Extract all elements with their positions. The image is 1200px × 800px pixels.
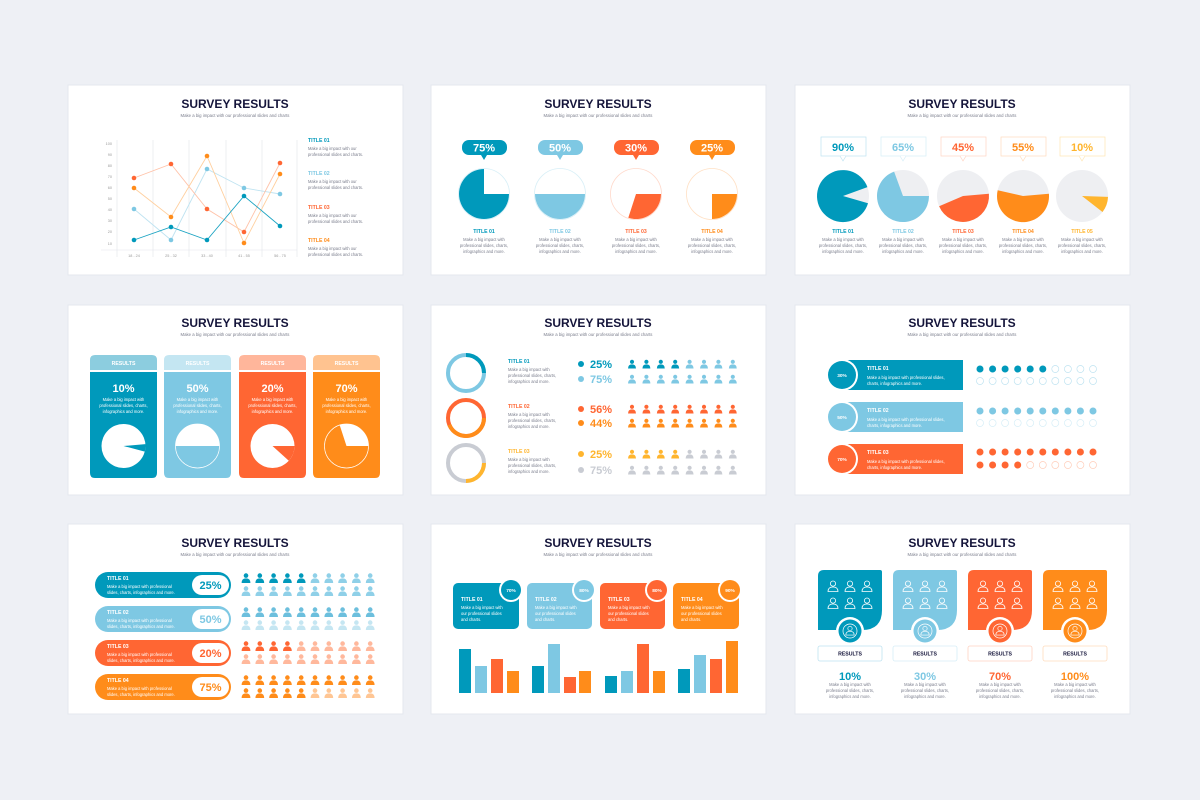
row 2: charts, infographics and more. <box>867 423 922 428</box>
captions: TITLE 02 <box>549 229 571 235</box>
title: SURVEY RESULTS <box>544 316 652 330</box>
pills: TITLE 01 <box>107 576 129 582</box>
card 2: Make a big impact with <box>177 397 219 402</box>
captions: professional slides, charts, <box>999 243 1047 248</box>
cards: and charts. <box>461 617 481 622</box>
people grid <box>628 360 737 474</box>
cards: TITLE 02 <box>535 597 557 603</box>
captions: TITLE 01 <box>473 229 495 235</box>
captions: TITLE 04 <box>701 229 723 235</box>
card 2: infographics and more. <box>177 409 218 414</box>
row texts: Make a big impact with <box>508 412 550 417</box>
pills: Make a big impact with professional <box>107 652 172 657</box>
card 4: infographics and more. <box>1054 694 1096 699</box>
row texts: professional slides, charts, <box>508 418 556 423</box>
subtitle: Make a big impact with our professional slides and charts <box>181 552 289 557</box>
row 3: charts, infographics and more. <box>867 465 922 470</box>
legend: Make a big impact with our <box>308 213 357 218</box>
line chart: 10 <box>108 242 112 246</box>
title: SURVEY RESULTS <box>181 316 289 330</box>
slide 5: rings and people <box>431 305 766 495</box>
captions: Make a big impact with <box>691 237 734 242</box>
card 2: RESULTS <box>913 652 937 658</box>
cards: and charts. <box>608 617 628 622</box>
card 4 <box>1043 570 1107 699</box>
card 4: Make a big impact with <box>1054 682 1097 687</box>
card 1: infographics and more. <box>103 409 144 414</box>
line chart: 60 <box>108 186 112 190</box>
card 4: 100% <box>1061 671 1089 683</box>
captions: professional slides, charts, <box>688 243 736 248</box>
bubbles <box>462 140 735 160</box>
card 1: professional slides, charts, <box>826 688 874 693</box>
card 3: professional slides, charts, <box>976 688 1024 693</box>
slide 3: five pies: 65% <box>892 142 914 154</box>
card 4: 70% <box>335 383 358 395</box>
pills: TITLE 02 <box>107 610 129 616</box>
captions: professional slides, charts, <box>612 243 660 248</box>
legend: Make a big impact with our <box>308 146 357 151</box>
cards <box>453 578 742 629</box>
card 1: Make a big impact with <box>829 682 872 687</box>
subtitle: Make a big impact with our professional slides and charts <box>544 332 652 337</box>
captions: infographics and more. <box>822 249 864 254</box>
captions: Make a big impact with <box>615 237 658 242</box>
card 4: RESULTS <box>335 361 359 367</box>
legend: professional slides and charts. <box>308 185 363 190</box>
subtitle: Make a big impact with our professional slides and charts <box>544 552 652 557</box>
captions: Make a big impact with <box>1061 237 1104 242</box>
card 1: 10% <box>112 383 135 395</box>
slide 9: people cards <box>795 524 1130 714</box>
row 2: Make a big impact with professional slides, <box>867 417 945 422</box>
row 3: TITLE 03 <box>867 450 889 456</box>
legend: TITLE 04 <box>308 238 330 244</box>
cards: 90% <box>725 588 736 594</box>
captions: professional slides, charts, <box>536 243 584 248</box>
title: SURVEY RESULTS <box>544 536 652 550</box>
row texts: Make a big impact with <box>508 457 550 462</box>
card 1: 10% <box>839 671 861 683</box>
card 2: 50% <box>186 383 209 395</box>
captions <box>819 229 1106 254</box>
line chart: 56 - 75 <box>274 254 286 258</box>
line chart: 30 <box>108 219 112 223</box>
line chart: 90 <box>108 153 112 157</box>
line chart: 80 <box>108 164 112 168</box>
card 4: professional slides, charts, <box>322 403 371 408</box>
card 2: professional slides, charts, <box>173 403 222 408</box>
captions: professional slides, charts, <box>879 243 927 248</box>
card 3: 20% <box>261 383 284 395</box>
captions <box>460 229 736 254</box>
captions: TITLE 05 <box>1071 229 1093 235</box>
row 2 <box>826 401 963 433</box>
slide 1: line chart <box>68 85 403 275</box>
card 1: RESULTS <box>838 652 862 658</box>
subtitle: Make a big impact with our professional slides and charts <box>181 113 289 118</box>
card 3 <box>239 355 306 478</box>
captions: infographics and more. <box>539 249 581 254</box>
legend: Make a big impact with our <box>308 246 357 251</box>
card 1: professional slides, charts, <box>99 403 148 408</box>
legend: TITLE 03 <box>308 205 330 211</box>
slide 3: five pies: 90% <box>832 142 854 154</box>
card 3: infographics and more. <box>979 694 1021 699</box>
dot matrix <box>976 366 1096 468</box>
captions: professional slides, charts, <box>939 243 987 248</box>
captions: Make a big impact with <box>822 237 865 242</box>
pills: TITLE 03 <box>107 644 129 650</box>
bubbles: 30% <box>625 142 647 154</box>
pills: slides, charts, infographics and more. <box>107 590 175 595</box>
card 3 <box>968 570 1032 699</box>
cards: Make a big impact with <box>681 605 723 610</box>
percentages: 25% <box>590 359 612 371</box>
card 4: professional slides, charts, <box>1051 688 1099 693</box>
row texts: TITLE 02 <box>508 404 530 410</box>
captions: professional slides, charts, <box>1058 243 1106 248</box>
card 4: Make a big impact with <box>326 397 368 402</box>
captions: TITLE 04 <box>1012 229 1034 235</box>
row 3: 70% <box>837 457 848 463</box>
pills: slides, charts, infographics and more. <box>107 658 175 663</box>
subtitle: Make a big impact with our professional slides and charts <box>544 113 652 118</box>
captions: TITLE 01 <box>832 229 854 235</box>
card 3: 70% <box>989 671 1011 683</box>
line chart: 18 - 24 <box>128 254 140 258</box>
card 4: infographics and more. <box>326 409 367 414</box>
legend: professional slides and charts. <box>308 252 363 257</box>
captions: TITLE 03 <box>952 229 974 235</box>
slide 7: pills and people <box>68 524 403 714</box>
cards: TITLE 01 <box>461 597 483 603</box>
row 3: Make a big impact with professional slides, <box>867 459 945 464</box>
percentages: 75% <box>590 374 612 386</box>
slide 3: five pies <box>795 85 1130 275</box>
cards: and charts. <box>681 617 701 622</box>
card 3: RESULTS <box>261 361 285 367</box>
pills: 50% <box>199 614 222 626</box>
percentages: 25% <box>590 449 612 461</box>
pills <box>95 572 231 700</box>
cards: our professional slides <box>461 611 502 616</box>
legend: professional slides and charts. <box>308 152 363 157</box>
cards: 80% <box>579 588 590 594</box>
line chart: 40 <box>108 208 112 212</box>
boxes <box>821 137 1105 161</box>
cards: Make a big impact with <box>608 605 650 610</box>
row 3 <box>826 443 963 475</box>
line chart: 41 - 55 <box>238 254 250 258</box>
card 3: professional slides, charts, <box>248 403 297 408</box>
title: SURVEY RESULTS <box>181 536 289 550</box>
legend: professional slides and charts. <box>308 219 363 224</box>
line chart: 25 - 32 <box>165 254 177 258</box>
card 1: RESULTS <box>112 361 136 367</box>
row texts: infographics and more. <box>508 424 550 429</box>
card 4 <box>313 355 380 478</box>
subtitle: Make a big impact with our professional slides and charts <box>908 552 1016 557</box>
legend: TITLE 01 <box>308 138 330 144</box>
pills: Make a big impact with professional <box>107 618 172 623</box>
card 2 <box>164 355 231 478</box>
row 2: 50% <box>837 415 848 421</box>
pills: 75% <box>199 682 222 694</box>
captions: Make a big impact with <box>539 237 582 242</box>
slide 4: result cards <box>68 305 403 495</box>
subtitle: Make a big impact with our professional slides and charts <box>181 332 289 337</box>
legend: Make a big impact with our <box>308 179 357 184</box>
cards: and charts. <box>535 617 555 622</box>
rings <box>448 355 484 481</box>
pies <box>458 168 738 220</box>
pills: TITLE 04 <box>107 678 129 684</box>
bubbles: 25% <box>701 142 723 154</box>
cards: Make a big impact with <box>461 605 503 610</box>
card 2: Make a big impact with <box>904 682 947 687</box>
bar chart <box>459 641 738 693</box>
card 2: RESULTS <box>186 361 210 367</box>
percentages: 75% <box>590 465 612 477</box>
legend: TITLE 02 <box>308 171 330 177</box>
pills: Make a big impact with professional <box>107 686 172 691</box>
row 1: Make a big impact with professional slides, <box>867 375 945 380</box>
cards: TITLE 03 <box>608 597 630 603</box>
percentages <box>578 359 612 477</box>
captions: infographics and more. <box>1002 249 1044 254</box>
pills: Make a big impact with professional <box>107 584 172 589</box>
percentages: 56% <box>590 404 612 416</box>
cards: our professional slides <box>608 611 649 616</box>
captions: Make a big impact with <box>1002 237 1045 242</box>
cards: 70% <box>506 588 517 594</box>
pills: slides, charts, infographics and more. <box>107 624 175 629</box>
slide 6: bars and dots <box>795 305 1130 495</box>
captions: infographics and more. <box>942 249 984 254</box>
line chart: 33 - 40 <box>201 254 213 258</box>
line chart: 20 <box>108 230 112 234</box>
bubbles: 75% <box>473 142 495 154</box>
card 1 <box>818 570 882 699</box>
slide 3: five pies: 55% <box>1012 142 1034 154</box>
line chart: 100 <box>106 142 112 146</box>
card 2 <box>893 570 957 699</box>
captions: Make a big impact with <box>463 237 506 242</box>
row texts: professional slides, charts, <box>508 373 556 378</box>
subtitle: Make a big impact with our professional slides and charts <box>908 113 1016 118</box>
card 1 <box>90 355 157 478</box>
captions: Make a big impact with <box>942 237 985 242</box>
row texts: infographics and more. <box>508 469 550 474</box>
row texts: TITLE 01 <box>508 359 530 365</box>
row texts <box>508 359 556 474</box>
title: SURVEY RESULTS <box>544 97 652 111</box>
row 1 <box>826 359 963 391</box>
card 2: infographics and more. <box>904 694 946 699</box>
row texts: TITLE 03 <box>508 449 530 455</box>
row 1: TITLE 01 <box>867 366 889 372</box>
card 3: infographics and more. <box>252 409 293 414</box>
captions: professional slides, charts, <box>819 243 867 248</box>
cards: Make a big impact with <box>535 605 577 610</box>
subtitle: Make a big impact with our professional slides and charts <box>908 332 1016 337</box>
captions: TITLE 03 <box>625 229 647 235</box>
captions: TITLE 02 <box>892 229 914 235</box>
cards: TITLE 04 <box>681 597 703 603</box>
card 2: 30% <box>914 671 936 683</box>
cards: our professional slides <box>535 611 576 616</box>
title: SURVEY RESULTS <box>908 316 1016 330</box>
slide 8: cards and bar chart <box>431 524 766 714</box>
captions: infographics and more. <box>615 249 657 254</box>
card 4: RESULTS <box>1063 652 1087 658</box>
captions: infographics and more. <box>691 249 733 254</box>
pills: 25% <box>199 580 222 592</box>
slide 2: pies with bubbles <box>431 85 766 275</box>
captions: infographics and more. <box>882 249 924 254</box>
captions: Make a big impact with <box>882 237 925 242</box>
captions: professional slides, charts, <box>460 243 508 248</box>
row texts: Make a big impact with <box>508 367 550 372</box>
title: SURVEY RESULTS <box>908 536 1016 550</box>
slide 3: five pies: 10% <box>1071 142 1093 154</box>
card 3: RESULTS <box>988 652 1012 658</box>
card 1: Make a big impact with <box>103 397 145 402</box>
legend <box>308 138 363 257</box>
card 3: Make a big impact with <box>252 397 294 402</box>
row 2: TITLE 02 <box>867 408 889 414</box>
line chart: 50 <box>108 197 112 201</box>
pills: 20% <box>199 648 222 660</box>
people grid <box>242 573 375 698</box>
slide 3: five pies: 45% <box>952 142 974 154</box>
captions: infographics and more. <box>463 249 505 254</box>
pills: slides, charts, infographics and more. <box>107 692 175 697</box>
title: SURVEY RESULTS <box>908 97 1016 111</box>
row texts: infographics and more. <box>508 379 550 384</box>
bubbles: 50% <box>549 142 571 154</box>
card 1: infographics and more. <box>829 694 871 699</box>
cards: our professional slides <box>681 611 722 616</box>
captions: infographics and more. <box>1061 249 1103 254</box>
title: SURVEY RESULTS <box>181 97 289 111</box>
card 2: professional slides, charts, <box>901 688 949 693</box>
row texts: professional slides, charts, <box>508 463 556 468</box>
line chart: 70 <box>108 175 112 179</box>
cards: 80% <box>652 588 663 594</box>
percentages: 44% <box>590 418 612 430</box>
card 3: Make a big impact with <box>979 682 1022 687</box>
line chart <box>101 140 297 258</box>
row 1: 30% <box>837 373 848 379</box>
row 1: charts, infographics and more. <box>867 381 922 386</box>
pies <box>817 170 1108 222</box>
